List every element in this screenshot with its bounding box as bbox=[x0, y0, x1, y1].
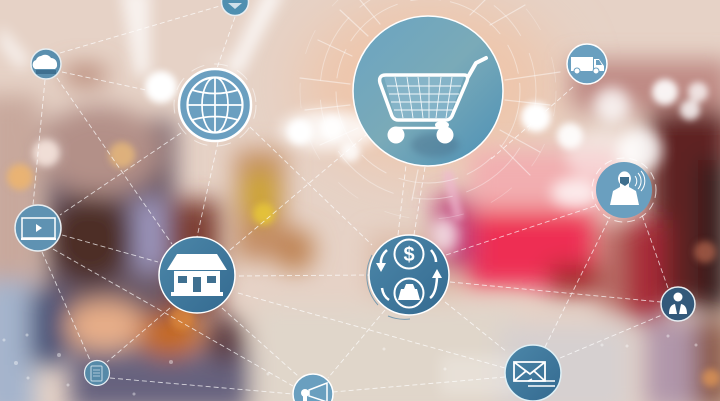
icon: business person bbox=[661, 287, 695, 321]
icon: cloud bbox=[31, 49, 61, 79]
node: top partial icon bbox=[222, 0, 248, 16]
icon: delivery truck bbox=[567, 44, 607, 84]
icon: video tablet bbox=[15, 205, 61, 251]
icon: payment exchange: $ bbox=[403, 244, 415, 266]
icon: email bbox=[505, 345, 561, 401]
icon: megaphone bbox=[293, 374, 333, 401]
rings and light streaks around cart bbox=[300, 0, 560, 219]
icon: headset agent bbox=[592, 158, 656, 222]
icon: mobile document bbox=[84, 360, 110, 386]
icon: store house bbox=[159, 237, 235, 313]
icon: shopping cart bbox=[353, 16, 503, 166]
icon: globe bbox=[174, 64, 256, 146]
icon: payment exchange bbox=[367, 235, 449, 319]
